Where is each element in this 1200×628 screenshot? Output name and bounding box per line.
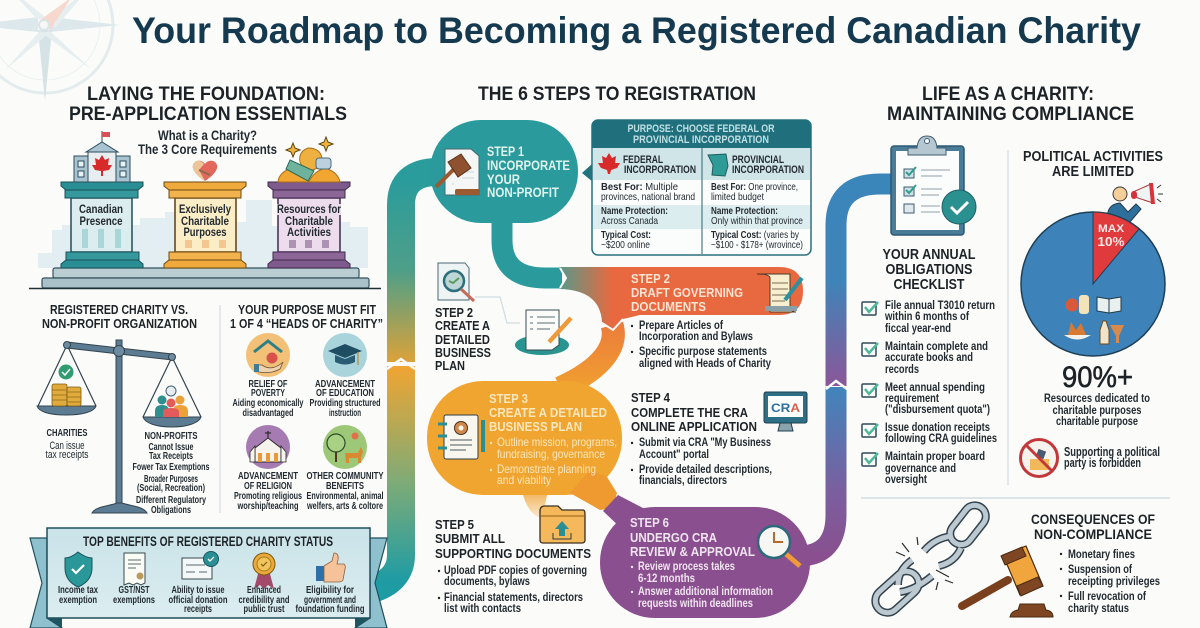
icon: gavel (962, 546, 1053, 617)
roadmap path: left arm (372, 172, 438, 589)
heading: political activities (1023, 149, 1163, 180)
icon: upload folder (540, 506, 585, 543)
panel: registered charity vs non-profit (37, 302, 210, 516)
text: step 5: documents, bylaws (444, 574, 530, 588)
title: Your Roadmap to Becoming a Registered Canadian Charity (132, 10, 1141, 51)
panel: consequences of non-compliance (870, 501, 1160, 618)
stat: 90 percent plus (1044, 361, 1150, 428)
icon: scroll and pen (757, 274, 802, 312)
heading: laying the foundation: PRE-APPLICATION ESSENTIALS (69, 103, 347, 125)
heading: consequences: NON-COMPLIANCE (1034, 526, 1152, 542)
text: advancement of education: Providing structured (310, 397, 380, 409)
text: step 2 create plan (435, 305, 491, 373)
text: step 1: INCORPORATE (487, 158, 570, 173)
text: step 2 create plan: DETAILED (435, 332, 490, 347)
list: consequences (1060, 547, 1160, 615)
text: enhanced credibility: Enhanced (247, 584, 281, 596)
icon: money bags and coins (278, 137, 340, 182)
text: income tax exemption: Income tax (58, 584, 98, 596)
icon: clock magnifier (758, 526, 800, 566)
text: step 6: STEP 6 (630, 515, 669, 530)
checklist item 3 (862, 380, 990, 416)
list: consequences: Monetary fines (1068, 547, 1135, 561)
heading: political activities: POLITICAL ACTIVITIES (1023, 149, 1163, 165)
text: non-profits: Obligations (151, 504, 191, 516)
ribbon tails (30, 538, 387, 628)
list: consequences: Full revocation of (1068, 589, 1147, 603)
skyline backdrop (38, 200, 368, 268)
text: enhanced credibility: public trust (244, 603, 285, 615)
text: other community benefits: welfers, arts & coltore (306, 500, 383, 512)
pillar: resources for charitable activities (268, 182, 350, 268)
subheading: what is a charity: What is a Charity? (158, 127, 257, 143)
column: provincial (711, 154, 804, 251)
text: advancement of education: OF EDUCATION (316, 388, 374, 399)
text: step 5 (435, 517, 591, 615)
text: step 6: UNDERGO CRA (630, 530, 718, 545)
text: other community benefits: BENEFITS (326, 481, 364, 492)
step 4: complete cra application (631, 390, 807, 487)
checklist item 4: Issue donation receipts (885, 420, 990, 434)
text: charities: CHARITIES (46, 427, 88, 439)
icon: notebook with gear (438, 415, 485, 459)
checklist item 3: requirement (885, 391, 939, 405)
bullets: step 2 draft: Prepare Articles of (639, 318, 724, 332)
step 2: create a detailed business plan (435, 263, 571, 373)
panel: heads of charity (230, 302, 384, 512)
text: official donation receipts: receipts (184, 603, 212, 615)
heading: charity vs non-profit: REGISTERED CHARITY VS. (50, 302, 188, 317)
text: official donation receipts: Ability to issue (172, 584, 225, 596)
text: other community benefits (306, 471, 384, 512)
checklist item 5: Maintain proper board (885, 449, 985, 463)
text: charities: tax receipts (46, 449, 89, 461)
text: step 5: STEP 5 (435, 517, 474, 532)
list: consequences: receipting privileges (1068, 574, 1160, 588)
icon: balance scale (37, 340, 201, 513)
chart: 90 / 10 pie: 10% (1098, 234, 1125, 249)
checklist item 2: Maintain complete and (885, 339, 988, 353)
text: step 2 draft: DRAFT GOVERNING (631, 285, 743, 300)
text: advancement of religion: ADVANCEMENT (238, 471, 298, 482)
text: non-profits: NON-PROFITS (144, 430, 198, 442)
panel: annual obligations checklist (862, 136, 997, 486)
text: step 3: CREATE A DETAILED (489, 405, 607, 420)
pillar: exclusively charitable purposes: Charitable (181, 216, 229, 228)
checklist item 3: Meet annual spending (885, 380, 985, 394)
icon: person with megaphone (1108, 183, 1163, 222)
column: provincial: Only within that province (711, 215, 803, 227)
column: provincial: INCORPORATION (732, 164, 804, 176)
checklist item 5: oversight (885, 472, 927, 486)
icon: document with pencil (515, 310, 571, 355)
subheading: what is a charity: The 3 Core Requirements (138, 141, 277, 157)
text: step 4: financials, directors (639, 473, 727, 487)
icon: award medal (253, 553, 275, 589)
heading: annual obligations: YOUR ANNUAL (882, 246, 976, 263)
pillar: exclusively charitable purposes: Exclusively (179, 204, 232, 216)
table header: PROVINCIAL INCORPORATION (633, 134, 769, 146)
bullets: step 2 draft (631, 318, 771, 370)
text: gst/nst exemptions: GST/NST (118, 584, 150, 596)
text: step 5: SUBMIT ALL (435, 531, 505, 546)
text: relief of poverty: disadvantaged (242, 407, 294, 419)
text: step 1: YOUR (487, 172, 520, 187)
text: relief of poverty: RELIEF OF (248, 379, 288, 390)
text: step 6: requests within deadlines (638, 596, 753, 610)
heading: laying the foundation (69, 83, 347, 125)
text: step 4: COMPLETE THE CRA (631, 405, 749, 420)
text: relief of poverty (232, 379, 304, 419)
text: step 4: STEP 4 (631, 390, 671, 405)
stat: 90 percent plus: charitable purpose (1056, 414, 1138, 428)
text: step 4 (631, 390, 772, 487)
heading: consequences: CONSEQUENCES OF (1031, 511, 1155, 527)
bullets: step 2 draft: Specific purpose statements (639, 344, 767, 358)
icon: shield (65, 552, 92, 587)
text: enhanced credibility: credibility and (238, 594, 290, 606)
text: step 2 create plan: BUSINESS (435, 345, 491, 360)
checklist item 2: accurate books and (885, 350, 973, 364)
checklist item 3: ("disbursement quota") (885, 402, 990, 416)
pillar: canadian presence: Presence (80, 216, 122, 228)
checklist item 1: ficcal year-end (885, 321, 951, 335)
icon: province shape (708, 154, 728, 176)
icon: thumbs up (316, 553, 345, 582)
text: supporting party forbidden: Supporting a political (1064, 445, 1160, 459)
checklist item 5: governance and (885, 461, 956, 475)
icon: no political party (1020, 440, 1058, 476)
text: step 6 (630, 515, 773, 610)
text: advancement of religion: Promoting religious (234, 490, 302, 502)
chart: 90 / 10 pie (1021, 212, 1165, 356)
column: provincial: Typical Cost: (varies by (711, 229, 800, 241)
heading: annual obligations: OBLIGATIONS (886, 261, 972, 278)
step 1 teal bubble (430, 120, 578, 278)
text: official donation receipts: official donation (168, 594, 228, 606)
step 6 purple bubble (600, 495, 810, 618)
text: eligibility for funding: foundation funding (296, 603, 364, 615)
column: provincial: PROVINCIAL (732, 154, 784, 166)
text: step 3: and viability (497, 473, 551, 487)
text: step 1: NON-PROFIT (487, 185, 560, 200)
text: non-profits: Cannot Issue (148, 441, 194, 453)
chart: 90 / 10 pie: MAX (1098, 223, 1125, 235)
text: supporting party forbidden (1064, 445, 1160, 470)
pillar: canadian presence: Canadian (79, 204, 123, 216)
text: step 3 (489, 391, 617, 487)
text: official donation receipts (168, 584, 228, 615)
text: step 4: Provide detailed descriptions, (639, 462, 772, 476)
heading: the 6 steps: THE 6 STEPS TO REGISTRATION (478, 84, 756, 105)
icon: advancement of education (323, 333, 367, 377)
text: non-profits: Different Regulatory (136, 494, 206, 506)
text: step 3: STEP 3 (489, 391, 528, 406)
text: supporting party forbidden: party is forbidden (1064, 456, 1141, 470)
checklist item 5 (862, 449, 985, 486)
icon: gavel on document (436, 149, 480, 195)
icon: heart handshake (193, 161, 217, 181)
list: consequences: charity status (1068, 601, 1129, 615)
step 2 banner: draft governing documents (560, 267, 803, 388)
column: provincial: Name Protection: (711, 205, 778, 217)
text: step 5: list with contacts (444, 601, 521, 615)
text: step 2 create plan: PLAN (435, 358, 465, 373)
text: step 1: STEP 1 (487, 144, 524, 159)
text: step 3: BUSINESS PLAN (489, 419, 582, 434)
heading: heads of charity (230, 302, 383, 331)
icon: compass rose watermark (0, 0, 120, 101)
text: advancement of religion: OF RELIGION (244, 481, 292, 492)
text: step 6: Review process takes (638, 559, 735, 573)
text: step 6: Answer additional information (638, 584, 773, 598)
text: non-profits: Fower Tax Exemptions (132, 461, 210, 473)
pillar: resources for charitable activities: Activities (287, 227, 331, 239)
heading: laying the foundation: LAYING THE FOUNDATION: (87, 83, 325, 105)
text: step 3: Outline mission, programs, (497, 435, 617, 449)
column: federal: provinces, national brand (601, 191, 695, 203)
icon: donation receipt card (182, 552, 218, 579)
step 5 connector (522, 490, 548, 518)
icons: food and books (1064, 295, 1124, 344)
text: step 6: 6-12 months (638, 571, 695, 585)
text: other community benefits: OTHER COMMUNITY (306, 471, 384, 482)
column: federal: Name Protection: (601, 205, 668, 217)
text: step 1 (487, 144, 570, 200)
text: relief of poverty: Aiding economically (232, 397, 304, 409)
text: step 4: Submit via CRA "My Business (639, 435, 771, 449)
text: step 4: Account" portal (639, 447, 709, 461)
list: consequences: Suspension of (1068, 562, 1133, 576)
checklist item 4 (862, 420, 997, 445)
text: non-profits: Tax Receipts (149, 450, 193, 462)
text: eligibility for funding (296, 584, 364, 615)
steps base (29, 268, 381, 288)
heading: heads of charity: 1 OF 4 “HEADS OF CHARITY” (230, 316, 383, 331)
panel: laying the foundation (29, 83, 381, 288)
text: step 2 draft (631, 271, 743, 314)
text: non-profits: Broader Purposes (144, 473, 198, 485)
text: relief of poverty: POVERTY (251, 388, 285, 399)
column: federal (601, 154, 696, 251)
stat: 90 percent plus: Resources dedicated to (1044, 391, 1150, 405)
text: enhanced credibility (238, 584, 290, 615)
heading: annual obligations (882, 246, 976, 293)
step 3 orange bubble (427, 381, 622, 510)
heading: life as a charity: LIFE AS A CHARITY: (922, 83, 1094, 105)
stat: 90 percent plus: charitable purposes (1052, 403, 1142, 417)
icon: advancement of religion (246, 425, 290, 469)
text: step 3: fundraising, governance (497, 447, 605, 461)
stat: 90 percent plus: 90%+ (1062, 361, 1133, 394)
icon: broken chain (870, 501, 990, 618)
table header (628, 123, 775, 146)
text: advancement of education: instruction (329, 407, 361, 419)
column: federal: Typical Cost: (601, 229, 651, 241)
text: advancement of education (310, 379, 380, 419)
heading: consequences (1031, 511, 1155, 542)
icon: government building with maple leaf (74, 131, 130, 182)
checklist item 4: following CRA guidelines (885, 431, 997, 445)
icon: coins with check (52, 364, 81, 406)
text: non-profits (132, 430, 210, 516)
icon: document with magnifier (438, 263, 474, 301)
bullets: step 2 draft: aligned with Heads of Charity (639, 356, 771, 370)
heading: top benefits: TOP BENEFITS OF REGISTERED CHARITY STATUS (83, 534, 333, 549)
pillar: exclusively charitable purposes: Purposes (184, 227, 226, 239)
icon: other community benefits (323, 425, 367, 469)
heading: charity vs non-profit (42, 302, 197, 331)
text: advancement of religion: worship/teaching (237, 500, 298, 512)
checklist item 1 (862, 298, 995, 335)
subheading: what is a charity (138, 127, 277, 157)
text: other community benefits: Environmental, animal (306, 490, 384, 502)
column: provincial: limited budget (711, 191, 764, 203)
heading: political activities: ARE LIMITED (1052, 164, 1134, 180)
checklist item 2 (862, 339, 988, 376)
column: provincial: Best For: One province, (711, 181, 798, 193)
panel: federal vs provincial table (582, 120, 811, 255)
column: provincial: ~$100 - $178+ (wrovince) (711, 239, 803, 251)
text: step 2 draft: STEP 2 (631, 271, 670, 286)
column: federal: FEDERAL (623, 154, 663, 166)
icon: relief of poverty (246, 333, 290, 377)
pillar: resources for charitable activities: Resources for (277, 204, 341, 216)
panel: political activities (1020, 149, 1165, 476)
text: step 5: Financial statements, directors (444, 590, 583, 604)
text: step 2 create plan: CREATE A (435, 318, 491, 333)
bullets: step 2 draft: Incorporation and Bylaws (639, 329, 753, 343)
column: federal: INCORPORATION (624, 164, 696, 176)
text: income tax exemption (58, 584, 98, 606)
checklist item 1: File annual T3010 return (885, 298, 995, 312)
text: eligibility for funding: Eligibility for (306, 584, 354, 596)
text: gst/nst exemptions (113, 584, 155, 606)
heading: life as a charity: MAINTAINING COMPLIANCE (887, 103, 1134, 125)
text: step 2 draft: DOCUMENTS (631, 299, 706, 314)
icon: CRA monitor: CRA (771, 401, 800, 415)
heading: heads of charity: YOUR PURPOSE MUST FIT (238, 302, 376, 317)
text: non-profits: (Social, Recreation) (137, 482, 205, 494)
icon: receipt (124, 553, 145, 585)
text: step 5: SUPPORTING DOCUMENTS (435, 546, 591, 561)
icon: maple leaf (598, 153, 620, 174)
text: charities: Can issue (50, 440, 84, 452)
text: gst/nst exemptions: exemptions (113, 594, 155, 606)
text: step 3: Demonstrate planning (497, 462, 596, 476)
text: step 6: REVIEW & APPROVAL (630, 544, 755, 559)
checklist item 1: within 6 months of (884, 309, 970, 323)
column: federal: Best For: Multiple (601, 181, 678, 193)
icon: people group (155, 386, 188, 417)
icon: CRA monitor (764, 392, 807, 431)
table header: PURPOSE: CHOOSE FEDERAL OR (628, 123, 775, 135)
column: federal: ~$200 online (601, 239, 650, 251)
heading: life as a charity (887, 83, 1134, 125)
text: income tax exemption: exemption (59, 594, 97, 606)
checklist item 2: records (885, 362, 919, 376)
text: step 2 create plan: STEP 2 (435, 305, 473, 320)
panel: top benefits banner (30, 528, 387, 628)
icon: clipboard with check (891, 136, 976, 235)
pillar: resources for charitable activities: Charitable (285, 216, 333, 228)
text: advancement of education: ADVANCEMENT (315, 379, 375, 390)
text: step 4: ONLINE APPLICATION (631, 419, 757, 434)
step 5: submit documents (435, 506, 591, 615)
heading: annual obligations: CHECKLIST (894, 276, 964, 293)
heading: charity vs non-profit: NON-PROFIT ORGANIZATION (42, 316, 197, 331)
text: step 5: Upload PDF copies of governing (444, 563, 587, 577)
pillar: exclusively charitable purposes (164, 182, 246, 268)
text: advancement of religion (234, 471, 302, 512)
column: federal: Across Canada (601, 215, 658, 227)
pillar: canadian presence (61, 182, 143, 268)
text: charities (46, 427, 89, 461)
roadmap path: right arm (800, 184, 895, 556)
text: eligibility for funding: government and (304, 594, 356, 606)
